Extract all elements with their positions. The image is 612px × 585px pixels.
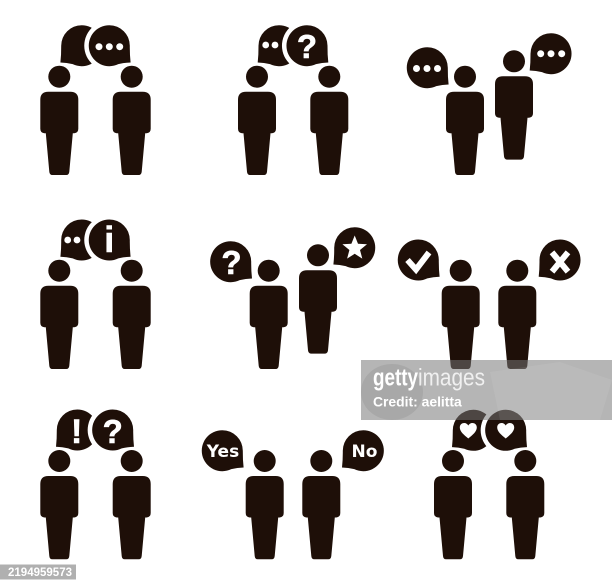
person right: [498, 260, 536, 369]
speech bubble: question mark: [92, 409, 134, 450]
speech bubble: heart right: [485, 410, 527, 451]
image id tag: 2194959573: [8, 567, 72, 579]
speech bubble: yes: [202, 430, 244, 471]
person right: [113, 66, 151, 175]
speech bubble: info: i: [104, 219, 114, 260]
speech bubble: no: [342, 430, 384, 471]
person left: [434, 450, 472, 559]
group: two people, typing and dots bubbles: [40, 25, 151, 175]
person left: [246, 450, 284, 559]
watermark logo: [373, 364, 485, 392]
person right: [310, 66, 348, 175]
person left: [40, 260, 78, 369]
speech bubble: question mark: [286, 25, 328, 66]
speech bubble: dots left: [407, 47, 449, 88]
group: two people, yes and no: [202, 430, 384, 559]
speech bubble: yes: Yes: [206, 442, 239, 462]
person right: [113, 260, 151, 369]
person right: [302, 450, 340, 559]
person front: [250, 260, 288, 369]
group: two people, exclamation and question: [40, 409, 151, 559]
group: two people, dots and info: [40, 219, 151, 369]
group: two people, question and star: [210, 227, 375, 369]
speech bubble: two dots: [258, 25, 300, 66]
speech bubble: blank left: [60, 25, 102, 66]
speech bubble: question mark: [210, 241, 252, 282]
person front: [446, 66, 484, 175]
person right: [506, 450, 544, 559]
group: two people, staggered with dots bubbles: [407, 33, 572, 175]
person back: [299, 244, 337, 354]
speech bubble: dots right: [530, 33, 572, 74]
speech bubble: exclamation: [56, 409, 98, 451]
speech bubble: cross: [539, 239, 581, 280]
speech bubble: heart left: [452, 410, 494, 451]
watermark logo: images: [418, 364, 485, 392]
group: two people, hearts: [434, 410, 544, 559]
speech bubble: three dots: [89, 25, 131, 66]
watermark banner: [361, 360, 612, 420]
speech bubble: two dots: [60, 219, 102, 260]
speech bubble: check mark: [398, 239, 440, 280]
group: two people, check and cross: [398, 239, 581, 369]
image id tag: [0, 564, 76, 580]
speech bubble: question mark: ?: [221, 244, 242, 281]
group: two people, dots and question: [238, 25, 348, 175]
speech bubble: question mark: ?: [103, 413, 123, 450]
person left: [40, 450, 78, 559]
speech bubble: exclamation: !: [71, 413, 82, 451]
person right: [113, 450, 151, 559]
person left: [40, 66, 78, 175]
person back: [495, 50, 533, 160]
speech bubble: question mark: ?: [297, 28, 317, 65]
watermark logo: getty: [373, 364, 419, 392]
speech bubble: star: [333, 227, 375, 268]
person left: [238, 66, 276, 175]
speech bubble: info: [89, 219, 131, 260]
watermark credit: Credit: aelitta: [373, 394, 462, 410]
person left: [442, 260, 480, 369]
speech bubble: no: No: [352, 442, 377, 462]
